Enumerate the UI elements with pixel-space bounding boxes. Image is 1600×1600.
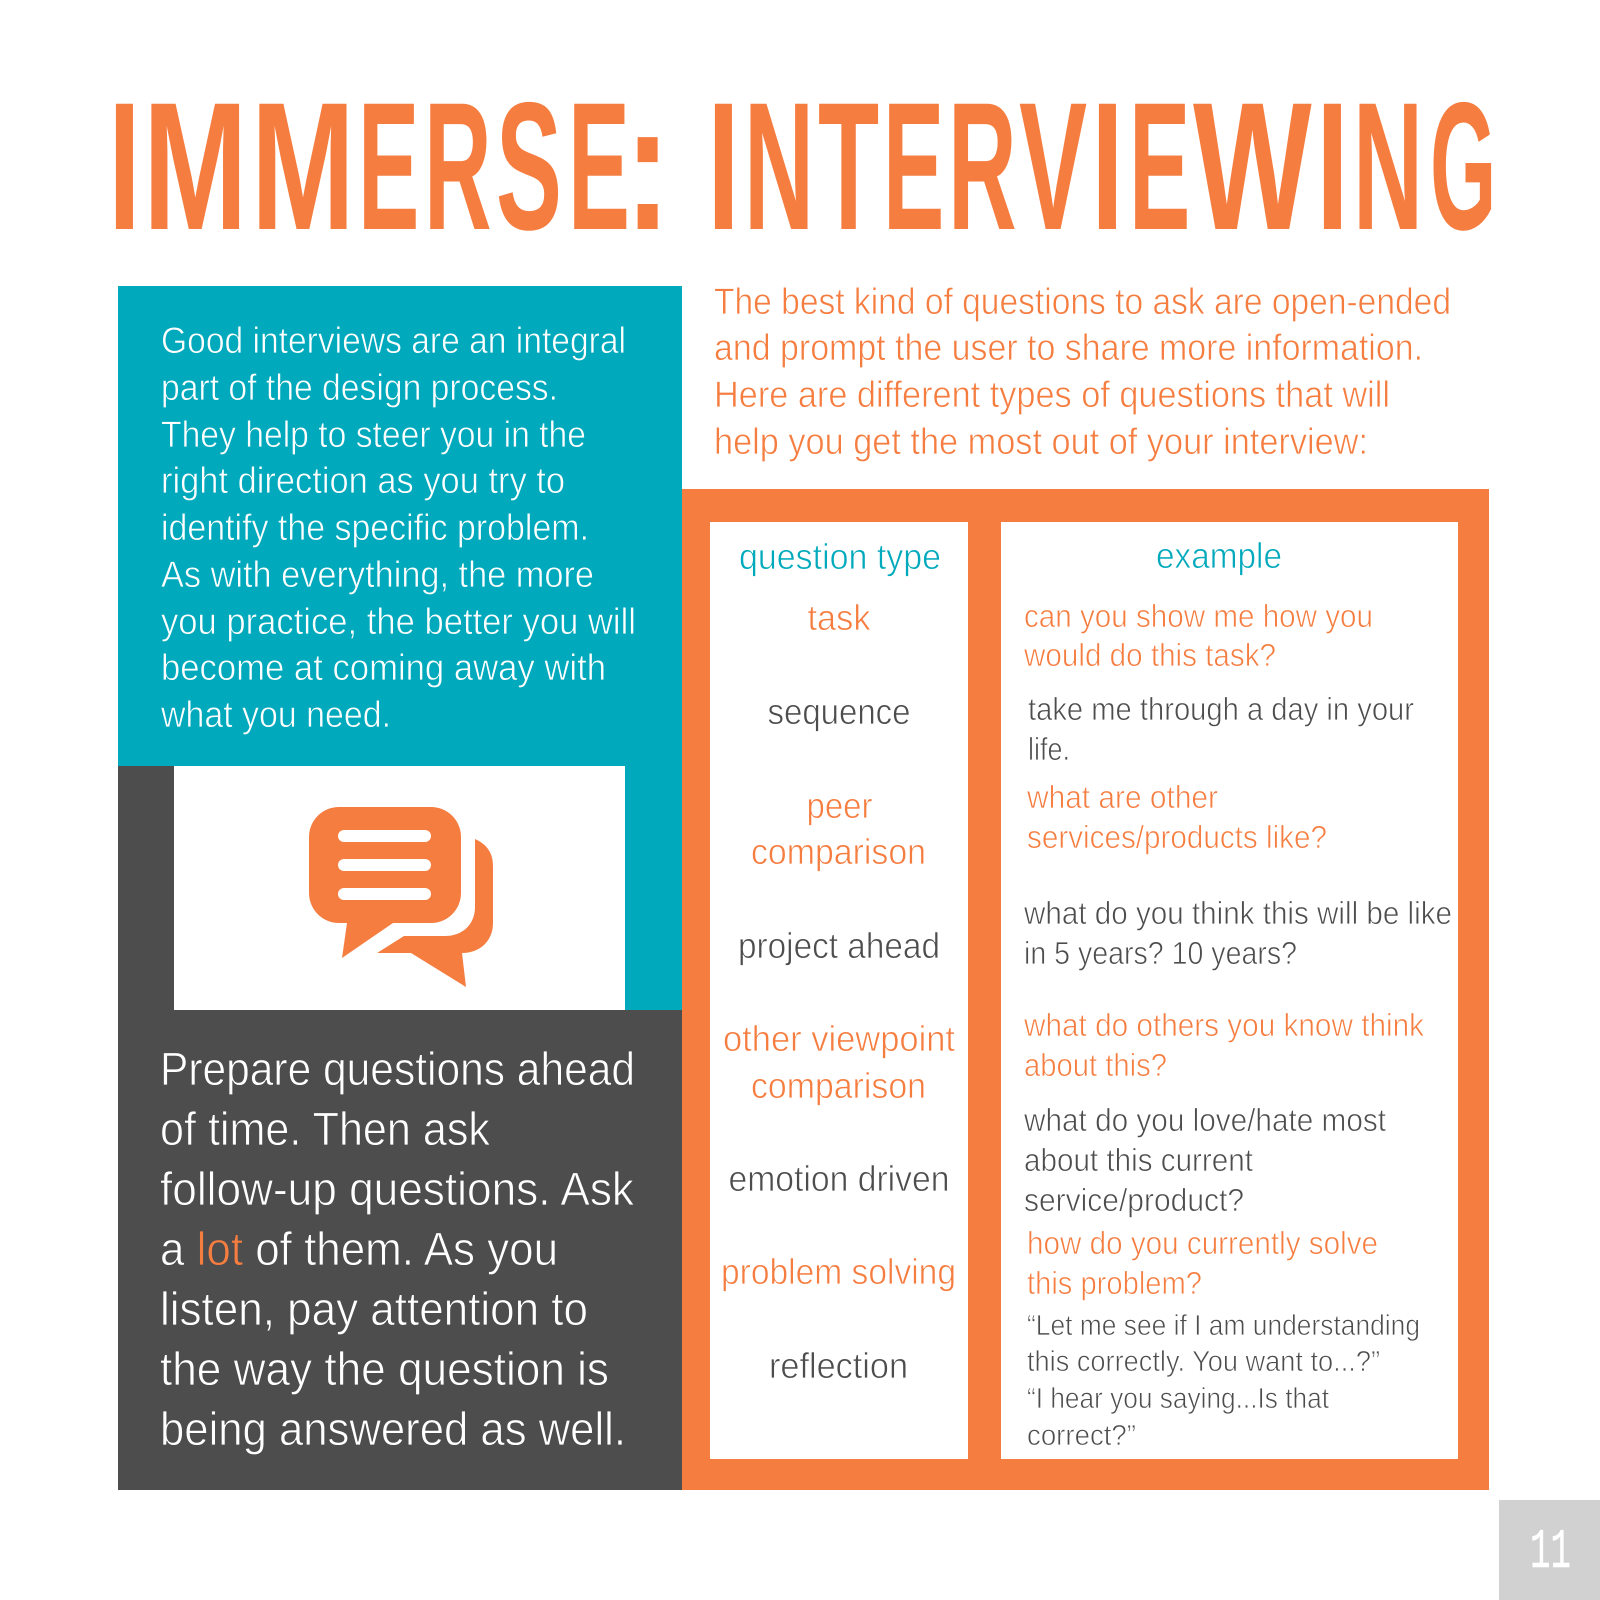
type labels: other viewpoint (723, 1018, 955, 1059)
icon: speech bubbles (309, 807, 493, 987)
type labels: emotion driven (728, 1158, 950, 1199)
text block: good interviews intro: right direction as you try to (161, 460, 565, 501)
title: W (1193, 64, 1311, 268)
example questions: what do you think this will be like (1023, 895, 1452, 931)
text block: open-ended questions intro: Here are different types of questions that will (714, 374, 1390, 415)
text block: good interviews intro: you practice, the better you will (161, 601, 636, 642)
reflection quotes: “Let me see if I am understanding (1027, 1310, 1420, 1342)
text block: good interviews intro: They help to steer you in the (161, 414, 586, 455)
example questions: service/product? (1024, 1182, 1244, 1218)
reflection quotes: “I hear you saying...Is that (1027, 1383, 1329, 1415)
text block: prepare questions advice: Prepare questions ahead (160, 1042, 635, 1095)
text block: open-ended questions intro: The best kind of questions to ask are open-ended (714, 281, 1451, 322)
page number (1499, 1500, 1600, 1600)
type labels: task (808, 597, 871, 638)
type labels: reflection (769, 1345, 908, 1386)
text block: good interviews intro: part of the design process. (161, 367, 558, 408)
text block: good interviews intro: As with everything, the more (161, 554, 594, 595)
text block: good interviews intro: become at coming away with (161, 647, 606, 688)
title: M (143, 64, 248, 268)
title: E (568, 64, 630, 268)
example questions: life. (1028, 731, 1070, 767)
text block: prepare questions advice: listen, pay attention to (160, 1282, 588, 1335)
title: : (624, 64, 672, 268)
reflection quotes: this correctly. You want to...?” (1027, 1346, 1380, 1378)
text block: prepare questions advice: a lot of them. As you (160, 1222, 558, 1275)
title: M (251, 64, 355, 268)
text block: prepare questions advice: being answered as well. (160, 1402, 626, 1455)
title: R (948, 64, 1016, 268)
example questions: about this? (1024, 1047, 1167, 1083)
example questions: in 5 years? 10 years? (1024, 935, 1297, 971)
column heading: question type: question type (739, 536, 941, 577)
title: N (744, 64, 814, 268)
title: S (496, 64, 562, 268)
title (108, 64, 1497, 268)
type labels: comparison (751, 831, 926, 872)
type labels: comparison (751, 1065, 926, 1106)
title: E (358, 64, 419, 268)
example questions: would do this task? (1023, 637, 1276, 673)
text block: prepare questions advice (160, 1042, 635, 1455)
type labels: peer (806, 785, 873, 826)
type labels: project ahead (738, 925, 940, 966)
type labels: sequence (768, 691, 910, 732)
title: I (108, 64, 141, 268)
column heading: example: example (1156, 535, 1282, 576)
text block: good interviews intro: Good interviews are an integral (161, 320, 626, 361)
reflection quotes (1027, 1310, 1420, 1452)
text block: prepare questions advice: of time. Then ask (160, 1102, 490, 1155)
example questions: what do you love/hate most (1023, 1102, 1386, 1138)
example questions: take me through a day in your (1028, 691, 1414, 727)
text block: good interviews intro: identify the specific problem. (161, 507, 589, 548)
panel: prepare questions (118, 766, 682, 1490)
title: V (1018, 64, 1087, 268)
example questions (1023, 598, 1452, 1301)
column: question type (710, 522, 968, 1459)
text block: good interviews intro (160, 320, 636, 735)
example questions: what do others you know think (1023, 1007, 1425, 1043)
title: G (1430, 64, 1497, 268)
example questions: what are other (1026, 779, 1218, 815)
example questions: how do you currently solve (1027, 1225, 1378, 1261)
title: T (818, 64, 879, 268)
title: I (1091, 64, 1124, 268)
reflection quotes: correct?” (1027, 1420, 1136, 1452)
example questions: can you show me how you (1024, 598, 1373, 634)
title: I (707, 64, 740, 268)
page number: 11 (1530, 1520, 1571, 1584)
title: E (1129, 64, 1190, 268)
type labels (721, 597, 956, 1386)
title: R (424, 64, 491, 268)
panel: icon card (174, 766, 625, 1010)
title: I (1316, 64, 1349, 268)
text block: good interviews intro: what you need. (160, 694, 391, 735)
text block: prepare questions advice: follow-up questions. Ask (160, 1162, 634, 1215)
text block: open-ended questions intro: and prompt the user to share more information. (714, 327, 1423, 368)
text block: prepare questions advice: the way the question is (160, 1342, 609, 1395)
type labels: problem solving (721, 1251, 956, 1292)
column: example (1001, 522, 1458, 1459)
text block: open-ended questions intro: help you get the most out of your interview: (714, 421, 1368, 462)
example questions: services/products like? (1027, 819, 1327, 855)
title: E (883, 64, 944, 268)
title: N (1352, 64, 1423, 268)
text block: open-ended questions intro (714, 281, 1451, 462)
panel: good interviews (118, 286, 682, 1010)
example questions: about this current (1024, 1142, 1253, 1178)
example questions: this problem? (1027, 1265, 1202, 1301)
panel: question table (682, 489, 1489, 1490)
